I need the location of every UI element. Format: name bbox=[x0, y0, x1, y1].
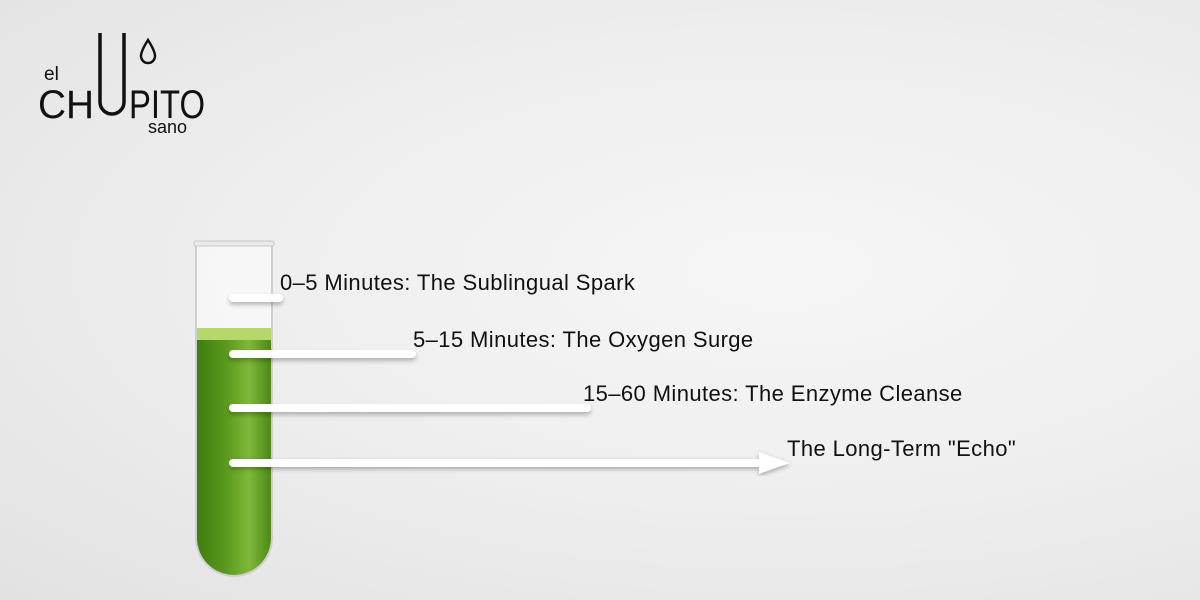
label 2: 5–15 Minutes: The Oxygen Surge bbox=[413, 327, 754, 352]
logo: el bbox=[44, 64, 59, 85]
label 4: The Long-Term "Echo" bbox=[787, 436, 1016, 461]
label 1: 0–5 Minutes: The Sublingual Spark bbox=[280, 270, 635, 295]
logo: PITO bbox=[129, 83, 205, 127]
label 3: 15–60 Minutes: The Enzyme Cleanse bbox=[583, 381, 963, 406]
test tube bbox=[194, 240, 274, 577]
logo: CH bbox=[38, 83, 94, 127]
logo: sano bbox=[148, 117, 187, 137]
bar 1 bbox=[229, 294, 283, 302]
bar 3 bbox=[229, 404, 591, 412]
arrow 4 bbox=[229, 452, 790, 476]
bar 2 bbox=[229, 350, 416, 358]
logo bbox=[38, 33, 205, 137]
